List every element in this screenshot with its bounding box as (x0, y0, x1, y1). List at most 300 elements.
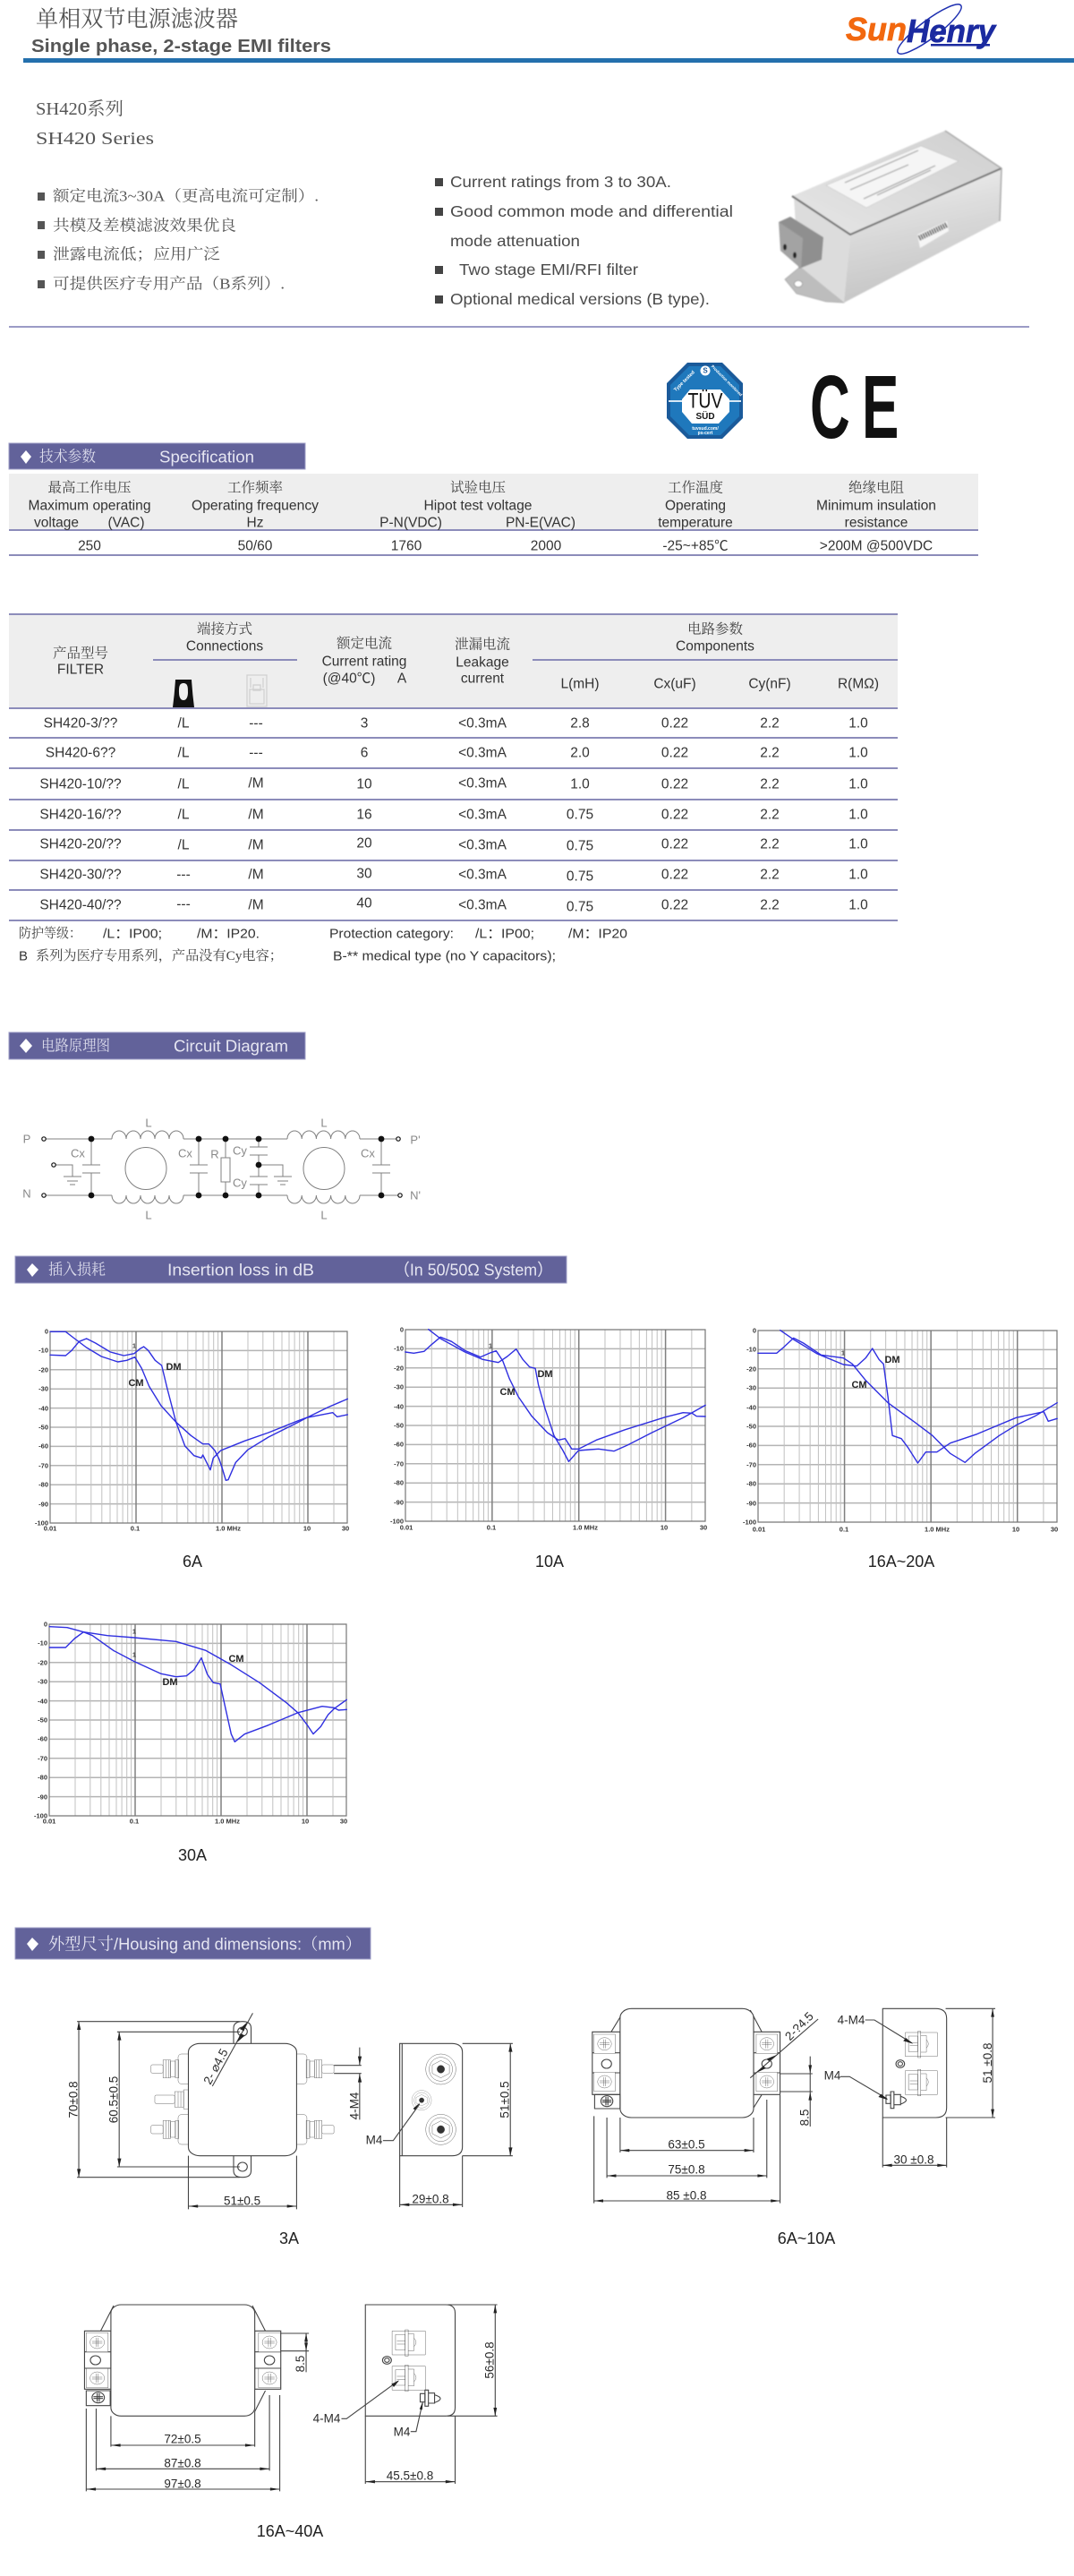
chart: insertion loss 10A: 0.01 (400, 1524, 413, 1531)
row: SH420-10: SH420-10/?? (39, 777, 122, 792)
chart: insertion loss 16A~20A: -80 (746, 1479, 756, 1488)
icon: TUV SUD certification badge: Production monitored (711, 364, 744, 398)
row: SH420-40: 0.22 (661, 897, 688, 913)
row: SH420-3: 0.22 (661, 716, 688, 731)
column: hipot test voltage: Hipot test voltage (424, 498, 532, 514)
chart: circuit schematic: L (320, 1116, 328, 1130)
row: SH420-6 (46, 745, 868, 761)
chart: insertion loss 10A: -80 (394, 1479, 404, 1486)
chart: insertion loss 10A: 10 (661, 1524, 668, 1531)
chart: circuit schematic: Cy (233, 1177, 247, 1189)
panel: product model table (9, 614, 898, 920)
chart: insertion loss 16A~20A: -50 (746, 1422, 756, 1431)
chart: 16A~40A housing drawing: 56±0.8 (483, 2341, 496, 2379)
row: SH420-40: <0.3mA (458, 897, 507, 913)
panel: insertion loss section header: Insertion loss in dB (167, 1261, 314, 1279)
chart: 16A~40A housing drawing: 4-M4 (313, 2412, 341, 2425)
icon: TUV SUD certification badge: S (703, 367, 708, 374)
icon: TUV SUD certification badge: Type tested (673, 370, 696, 393)
table header: Connections (186, 639, 263, 654)
chart: insertion loss 30A: -20 (38, 1658, 47, 1667)
row: SH420-6: 2.0 (570, 745, 590, 761)
text block: protection footnotes (19, 926, 627, 963)
text block: protection footnotes: /M：IP20. (197, 926, 260, 942)
chart: insertion loss 30A: -10 (38, 1639, 47, 1647)
chart: insertion loss 10A: -40 (394, 1402, 404, 1411)
column: operating temperature: -25~+85℃ (662, 539, 729, 553)
row: SH420-3: --- (249, 716, 263, 731)
row: SH420-10: 2.2 (760, 777, 780, 792)
chart: insertion loss 6A: -50 (38, 1424, 48, 1431)
chart: insertion loss 6A: -60 (38, 1442, 48, 1451)
chart: insertion loss 6A: DM (166, 1362, 182, 1373)
chart: insertion loss 6A (35, 1327, 349, 1570)
chart: insertion loss 16A~20A: -30 (746, 1384, 756, 1391)
chart: insertion loss 16A~20A: -70 (746, 1461, 756, 1468)
header rule (23, 58, 1074, 63)
row: SH420-6: /L (178, 745, 190, 761)
text block: Chinese features: 额定电流3~30A（更高电流可定制）. (53, 188, 319, 204)
chart: insertion loss 16A~20A: CM (851, 1380, 867, 1391)
chart: 6A~10A housing drawing: 51 ±0.8 (981, 2043, 994, 2083)
row: SH420-16: 0.75 (567, 808, 593, 822)
table header: A (397, 672, 407, 686)
chart: insertion loss 10A: -90 (394, 1499, 404, 1506)
row: SH420-10 (39, 775, 868, 792)
chart: insertion loss 30A: 10 (302, 1818, 309, 1825)
text block: protection footnotes: /L：IP00; (103, 926, 162, 942)
chart: 6A~10A housing drawing: 2-?4.5 (782, 2009, 816, 2043)
row: SH420-3: /L (178, 716, 190, 731)
text block: Chinese features: 可提供医疗专用产品（B系列）. (53, 276, 285, 292)
chart: insertion loss 30A: -70 (38, 1755, 47, 1762)
row: SH420-40: 0.75 (567, 899, 593, 915)
row: SH420-20: 0.22 (661, 836, 688, 852)
text block: English features: Good common mode and differential (450, 202, 733, 220)
panel: specification section header: 技术参数 (39, 448, 96, 466)
table header: L(mH) (560, 677, 600, 691)
column: max operating voltage: voltage (34, 516, 79, 530)
text block: Chinese features (38, 188, 319, 292)
section divider (9, 326, 1029, 328)
table header: 电路参数 (687, 621, 743, 638)
chart: 16A~40A housing drawing (84, 2305, 498, 2540)
chart: 6A~10A housing drawing: 8.5 (798, 2110, 811, 2126)
chart: insertion loss 6A: 0.1 (131, 1524, 140, 1533)
logo: SunHenry (846, 0, 997, 60)
chart: insertion loss 30A: -50 (38, 1716, 47, 1724)
chart: insertion loss 16A~20A: -90 (746, 1499, 756, 1508)
chart: 3A housing drawing: 2- ⌀4.5 (200, 2047, 231, 2086)
chart: 6A~10A housing drawing: 4-M4 (838, 2013, 865, 2027)
table header: Current rating (322, 654, 406, 670)
chart: 6A~10A housing drawing: 6A~10A (778, 2229, 835, 2247)
panel: specification table (9, 474, 978, 555)
panel: circuit diagram section header: 电路原理图 (41, 1037, 110, 1055)
row: SH420-20: 2.2 (760, 836, 780, 852)
row: SH420-40: /M (248, 897, 264, 913)
row: SH420-10: 10 (356, 777, 372, 792)
chart: 6A~10A housing drawing: 30 ±0.8 (894, 2152, 933, 2167)
chart: 3A housing drawing: M4 (366, 2133, 383, 2147)
icon: black IP00 terminal (173, 680, 194, 707)
chart: insertion loss 6A: -90 (38, 1501, 48, 1508)
table header: Leakage (456, 655, 509, 670)
chart: 3A housing drawing: 29±0.8 (412, 2192, 449, 2206)
chart: circuit schematic: Cx (361, 1146, 375, 1160)
chart: insertion loss 10A: -100 (390, 1517, 404, 1526)
column: operating frequency: 工作频率 (227, 480, 283, 496)
chart: insertion loss 30A: -100 (34, 1812, 47, 1819)
chart: insertion loss 10A: 10A (535, 1553, 564, 1570)
chart: circuit schematic: P (23, 1132, 30, 1146)
column: operating temperature (658, 480, 733, 553)
row: SH420-6: 1.0 (848, 745, 868, 761)
table header: Components (676, 639, 754, 654)
row: SH420-16: 0.22 (661, 808, 688, 822)
chart: insertion loss 30A: -40 (38, 1698, 47, 1705)
chart: insertion loss 6A: -70 (38, 1461, 48, 1470)
logo: SunHenry: Henry (907, 13, 997, 49)
column: minimum insulation resistance: >200M @500VDC (820, 539, 933, 553)
text block: protection footnotes: B (19, 949, 28, 963)
text block: protection footnotes: /L：IP00; (475, 926, 534, 942)
heading: English series name: SH420 Series (36, 129, 154, 149)
row: SH420-3: <0.3mA (458, 716, 507, 731)
chart: circuit schematic: Cy (233, 1144, 247, 1157)
column: operating temperature: Operating (665, 498, 726, 514)
icon: pale IP20 terminal (247, 675, 267, 706)
chart: insertion loss 30A: 1.0 MHz (215, 1818, 240, 1825)
table header: FILTER (57, 663, 104, 677)
table header: current (461, 672, 505, 686)
chart: insertion loss 30A: 30 (340, 1818, 347, 1825)
chart: 3A housing drawing: 4-M4 (347, 2092, 362, 2119)
row: SH420-40: 40 (356, 895, 372, 911)
chart: 6A~10A housing drawing: 85 ±0.8 (667, 2188, 706, 2203)
table header: 泄漏电流 (455, 636, 510, 652)
chart: 3A housing drawing: 60.5±0.5 (107, 2076, 120, 2123)
row: SH420-3: 1.0 (848, 716, 868, 731)
column: max operating voltage: Maximum operating (29, 498, 150, 514)
row: SH420-30: 0.75 (567, 869, 593, 885)
row: SH420-3: 2.8 (570, 716, 590, 731)
chart: 3A housing drawing: 70±0.8 (66, 2081, 81, 2118)
chart: insertion loss 16A~20A: 1.0 MHz (925, 1526, 950, 1533)
chart: insertion loss 10A: 1 (489, 1341, 492, 1350)
row: SH420-20: <0.3mA (458, 838, 507, 852)
chart: insertion loss 16A~20A: 10 (1012, 1526, 1019, 1533)
chart: 3A housing drawing: 51±0.5 (498, 2081, 512, 2118)
chart: insertion loss 16A~20A: -20 (746, 1365, 756, 1374)
icon: TUV SUD certification badge: tuvsud.com/ (692, 426, 719, 432)
row: SH420-6: <0.3mA (458, 745, 507, 761)
row: SH420-16: SH420-16/?? (39, 808, 122, 822)
chart: insertion loss 16A~20A: 0 (753, 1327, 756, 1334)
chart: insertion loss 16A~20A: 0.1 (840, 1526, 848, 1533)
table header: Cx(uF) (653, 677, 696, 691)
row: SH420-16: /M (248, 808, 264, 822)
row: SH420-20: /L (178, 838, 190, 852)
chart: insertion loss 10A: 1.0 MHz (573, 1524, 598, 1531)
chart: insertion loss 16A~20A: -60 (746, 1442, 756, 1449)
text block: protection footnotes: 防护等级： (19, 926, 81, 941)
chart: 6A~10A housing drawing: 75±0.8 (668, 2163, 705, 2176)
chart: insertion loss 16A~20A: 16A~20A (868, 1553, 934, 1570)
heading: English title: Single phase, 2-stage EMI filters (31, 37, 331, 56)
chart: 16A~40A housing drawing: M4 (394, 2425, 411, 2439)
column: operating temperature: 工作温度 (668, 480, 723, 496)
table header: 产品型号 (53, 645, 108, 661)
row: SH420-16: 16 (356, 808, 372, 822)
chart: insertion loss 10A: -30 (394, 1382, 404, 1391)
row: SH420-16: <0.3mA (458, 808, 507, 822)
table header: (@40℃) (323, 672, 375, 686)
column: operating frequency: Hz (247, 516, 263, 530)
chart: insertion loss 30A: -90 (38, 1793, 47, 1801)
chart: insertion loss 16A~20A: -10 (746, 1345, 756, 1354)
row: SH420-40: SH420-40/?? (39, 897, 122, 913)
chart: insertion loss 10A: -20 (394, 1365, 404, 1372)
row: SH420-16: /L (178, 808, 190, 822)
column: hipot test voltage: 1760 (391, 539, 422, 553)
text block: protection footnotes: /M：IP20 (568, 926, 627, 942)
chart: 3A housing drawing: 3A (279, 2229, 299, 2247)
chart: 16A~40A housing drawing: 16A~40A (257, 2522, 323, 2540)
chart: insertion loss 30A: CM (228, 1654, 244, 1665)
row: SH420-30: <0.3mA (458, 867, 507, 883)
heading: Chinese title: 单相双节电源滤波器 (36, 7, 238, 32)
chart: circuit schematic: P' (410, 1134, 421, 1146)
row: SH420-30: --- (176, 867, 191, 883)
chart: insertion loss 6A: 0.01 (44, 1524, 56, 1533)
row: SH420-30 (39, 867, 868, 885)
row: SH420-6: 0.22 (661, 745, 688, 761)
row: SH420-20 (39, 836, 868, 854)
row: SH420-40: 2.2 (760, 897, 780, 913)
panel: insertion loss section header: 插入损耗 (48, 1261, 106, 1279)
icon: TUV SUD certification badge: TÜV (687, 389, 723, 414)
chart: circuit schematic: Cx (178, 1146, 192, 1160)
chart: insertion loss 16A~20A: -100 (743, 1519, 756, 1526)
chart: 16A~40A housing drawing: 87±0.8 (164, 2457, 201, 2469)
chart: insertion loss 30A (34, 1621, 347, 1864)
table header: 端接方式 (197, 621, 252, 638)
column: minimum insulation resistance: resistance (845, 516, 908, 530)
column: max operating voltage: (VAC) (107, 516, 145, 530)
chart: circuit schematic: N (22, 1187, 31, 1200)
panel: circuit diagram section header: Circuit Diagram (174, 1037, 288, 1055)
chart: insertion loss 10A: -10 (394, 1345, 404, 1352)
chart: insertion loss 16A~20A: 1 (841, 1348, 845, 1357)
row: SH420-20: 1.0 (848, 836, 868, 852)
chart: insertion loss 6A: CM (128, 1378, 144, 1389)
column: max operating voltage: 250 (78, 539, 101, 553)
chart: 16A~40A housing drawing: 45.5±0.8 (387, 2469, 433, 2482)
chart: 6A~10A housing drawing (592, 2008, 995, 2247)
chart: insertion loss 30A: -80 (38, 1773, 47, 1782)
row: SH420-3: 3 (361, 716, 368, 731)
row: SH420-16: 1.0 (848, 808, 868, 822)
chart: 16A~40A housing drawing: 97±0.8 (164, 2477, 201, 2491)
row: SH420-10: <0.3mA (458, 775, 507, 792)
chart: insertion loss 6A: -40 (38, 1404, 48, 1413)
text block: English features: Current ratings from 3 to 30A. (450, 173, 671, 191)
chart: insertion loss 6A: 1 (132, 1341, 136, 1350)
chart: insertion loss 30A: 30A (178, 1846, 207, 1864)
heading: Chinese series name: SH420系列 (36, 98, 124, 119)
series heading (36, 98, 154, 149)
chart: 6A~10A housing drawing: M4 (824, 2068, 841, 2083)
logo: SunHenry: Sun (846, 11, 907, 47)
chart: insertion loss 16A~20A: -40 (746, 1404, 756, 1411)
row: SH420-10: /L (178, 777, 190, 792)
icon: TUV SUD certification badge: ps-cert (698, 431, 713, 436)
chart: circuit schematic (22, 1116, 421, 1221)
chart: 6A~10A housing drawing: 63±0.5 (668, 2138, 705, 2151)
panel: housing and dimensions section header (15, 1928, 371, 1959)
chart: circuit schematic: N' (410, 1189, 421, 1202)
row: SH420-3 (44, 716, 868, 731)
row: SH420-6: 6 (361, 745, 368, 761)
chart: insertion loss 10A: -70 (394, 1459, 404, 1468)
column: hipot test voltage: 2000 (531, 539, 562, 553)
chart: insertion loss 6A: -30 (38, 1384, 48, 1393)
chart: circuit schematic: Cx (71, 1146, 85, 1160)
table header: R(MΩ) (838, 677, 879, 691)
panel: circuit diagram section header (9, 1032, 305, 1059)
row: SH420-3: 2.2 (760, 716, 780, 731)
table header: 额定电流 (337, 636, 392, 652)
row: SH420-6: --- (249, 745, 263, 761)
chart: insertion loss 30A: 0.01 (43, 1818, 55, 1825)
row: SH420-10: 1.0 (848, 777, 868, 792)
chart: insertion loss 10A: -60 (394, 1440, 404, 1449)
table header: Cy(nF) (748, 677, 791, 691)
row: SH420-16 (39, 808, 868, 822)
chart: circuit schematic: L (320, 1209, 328, 1221)
chart: insertion loss 30A: 1 (132, 1628, 136, 1635)
text block: Chinese features: 共模及差模滤波效果优良 (53, 217, 236, 235)
chart: insertion loss 10A: 30 (700, 1524, 707, 1531)
chart: insertion loss 10A: CM (499, 1387, 516, 1398)
text block: Chinese features: 泄露电流低；应用广泛 (53, 245, 220, 263)
row: SH420-10: 1.0 (570, 777, 590, 792)
chart: insertion loss 6A: -10 (38, 1347, 48, 1354)
chart: circuit schematic: R (210, 1148, 219, 1160)
table header (53, 621, 879, 691)
row: SH420-30: 0.22 (661, 867, 688, 883)
row: SH420-20: 20 (356, 836, 372, 851)
column: hipot test voltage: 试验电压 (450, 480, 506, 496)
row: SH420-40: --- (176, 897, 191, 911)
chart: insertion loss 6A: 0 (45, 1327, 48, 1336)
chart: circuit schematic: L (145, 1116, 152, 1130)
text block: English features: mode attenuation (450, 232, 580, 250)
row: SH420-20: /M (248, 838, 264, 852)
chart: insertion loss 6A: 1.0 MHz (216, 1524, 241, 1533)
column: operating frequency: 50/60 (238, 539, 273, 553)
row: SH420-40: 1.0 (848, 897, 868, 913)
chart: insertion loss 30A: 0 (44, 1621, 47, 1628)
chart: insertion loss 10A: 0 (400, 1325, 404, 1334)
icon: CE mark: E (862, 357, 899, 458)
chart: insertion loss 30A: 1 (132, 1651, 136, 1658)
title: page header (23, 7, 1074, 63)
column: operating temperature: temperature (658, 516, 733, 530)
column: max operating voltage (29, 478, 150, 553)
text block: protection footnotes: Protection category: (329, 926, 454, 942)
chart: insertion loss 6A: -100 (35, 1519, 48, 1528)
row: SH420-3: SH420-3/?? (44, 716, 118, 731)
chart: insertion loss 10A (390, 1325, 707, 1570)
row: SH420-30: 1.0 (848, 867, 868, 883)
column: hipot test voltage (379, 480, 575, 553)
chart: insertion loss 16A~20A: 30 (1051, 1526, 1058, 1533)
row: SH420-6: 2.2 (760, 745, 780, 761)
text block: protection footnotes: 系列为医疗专用系列，产品没有Cy电容； (36, 947, 283, 963)
icon: TUV SUD certification badge: SÜD (696, 410, 715, 422)
row: SH420-20: SH420-20/?? (39, 836, 122, 852)
icon: CE mark: C (810, 357, 850, 458)
chart: 3A housing drawing: 51±0.5 (224, 2194, 260, 2208)
chart: insertion loss 16A~20A: DM (884, 1355, 900, 1365)
chart: 16A~40A housing drawing: 72±0.5 (164, 2432, 201, 2446)
chart: insertion loss 6A: 10 (303, 1524, 311, 1533)
chart: insertion loss 30A: -60 (38, 1735, 47, 1742)
chart: insertion loss 16A~20A: 0.01 (753, 1526, 765, 1533)
chart: insertion loss 6A: 6A (183, 1553, 202, 1570)
row: SH420-6: SH420-6?? (46, 745, 116, 761)
chart: circuit schematic: L (145, 1209, 152, 1221)
column: minimum insulation resistance: Minimum insulation (816, 498, 936, 514)
panel: insertion loss section header: （In 50/50Ω System） (394, 1261, 553, 1279)
chart: insertion loss 10A: -50 (394, 1422, 404, 1429)
row: SH420-10: 0.22 (661, 777, 688, 792)
chart: insertion loss 10A: DM (537, 1369, 553, 1380)
chart: insertion loss 30A: 0.1 (130, 1818, 139, 1825)
column: operating frequency: Operating frequency (192, 498, 319, 514)
row: SH420-16: 2.2 (760, 808, 780, 822)
row: SH420-30: 30 (356, 867, 372, 881)
icon: product photo of filter (779, 131, 1002, 303)
chart: 3A housing drawing (66, 2013, 513, 2247)
column: hipot test voltage: PN-E(VAC) (506, 516, 575, 530)
row: SH420-20: 0.75 (567, 838, 593, 854)
text block: English features: Two stage EMI/RFI filter (459, 261, 638, 278)
chart: insertion loss 16A~20A (743, 1327, 1058, 1570)
panel: housing and dimensions section header: 外型尺寸/Housing and dimensions:（mm） (48, 1934, 362, 1954)
column: max operating voltage: 最高工作电压 (47, 478, 132, 496)
text block: English features: Optional medical versions (B type). (450, 290, 710, 308)
chart: insertion loss 30A: -30 (38, 1678, 47, 1685)
row: SH420-40 (39, 895, 868, 915)
chart: 16A~40A housing drawing: 8.5 (294, 2356, 307, 2372)
column: operating frequency (192, 480, 319, 553)
panel: specification section header: Specification (159, 448, 254, 466)
chart: insertion loss 6A: 30 (342, 1524, 349, 1533)
column: minimum insulation resistance: 绝缘电阻 (848, 480, 904, 496)
row: SH420-10: /M (248, 775, 264, 792)
text block: English features (435, 173, 733, 308)
panel: specification section header (9, 443, 305, 469)
panel: insertion loss section header (15, 1256, 567, 1283)
row: SH420-30: SH420-30/?? (39, 867, 122, 883)
row: SH420-30: /M (248, 867, 264, 883)
chart: insertion loss 6A: -80 (38, 1481, 48, 1488)
chart: insertion loss 10A: 0.1 (487, 1524, 496, 1531)
chart: insertion loss 6A: -20 (38, 1366, 48, 1374)
